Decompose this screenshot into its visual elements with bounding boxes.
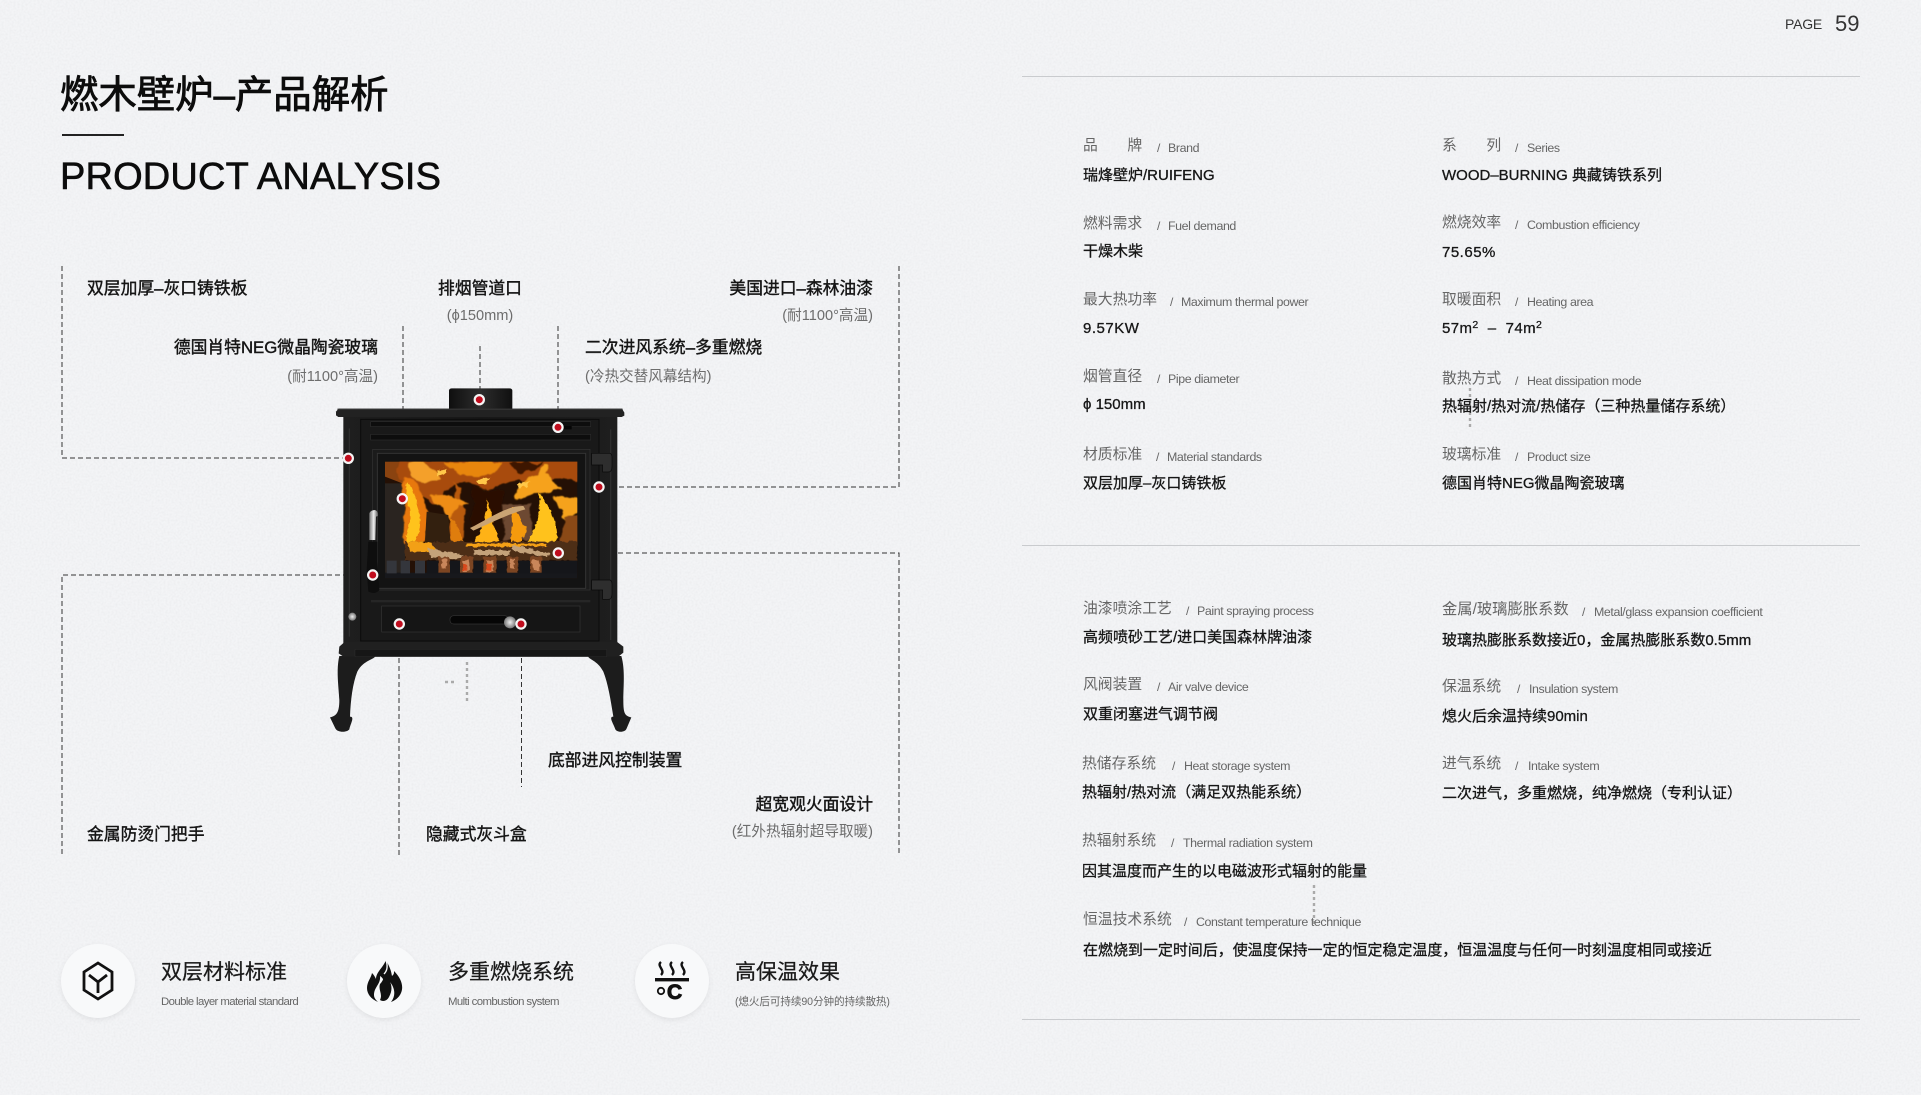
spec: glass: Product size [1527, 450, 1590, 464]
page number: PAGE [1785, 16, 1822, 32]
spec: thermal radiation: / [1171, 836, 1174, 850]
spec: glass: / [1515, 450, 1518, 464]
icon: heat and temperature [635, 944, 709, 1018]
spec: max power [1083, 291, 1308, 337]
callout: air curtain: (冷热交替风幕结构) [585, 369, 711, 385]
spec: intake: 二次进气，多重燃烧，纯净燃烧（专利认证） [1442, 785, 1742, 802]
spec: pipe diameter: / [1157, 372, 1160, 386]
spec: efficiency [1442, 214, 1640, 261]
spec: efficiency: Combustion efficiency [1527, 218, 1640, 232]
divider bottom [1022, 1019, 1860, 1020]
spec: heating area: / [1515, 295, 1518, 309]
spec: thermal radiation: 因其温度而产生的以电磁波形式辐射的能量 [1082, 863, 1367, 880]
spec: thermal radiation: Thermal radiation system [1183, 836, 1312, 850]
spec: insulation: 保温系统 [1442, 679, 1501, 695]
spec: pipe diameter [1083, 368, 1240, 413]
spec: insulation: / [1517, 682, 1520, 696]
spec: heat storage: 热辐射/热对流（满足双热能系统） [1082, 784, 1311, 801]
feature: multi combustion: 多重燃烧系统 [448, 961, 574, 984]
spec: constant temperature: 恒温技术系统 [1083, 912, 1172, 928]
spec: insulation: Insulation system [1529, 682, 1618, 696]
spec: heat dissipation: Heat dissipation mode [1527, 374, 1641, 388]
spec: thermal radiation [1082, 832, 1367, 880]
wood stove illustration [330, 388, 632, 732]
spec: max power: Maximum thermal power [1181, 295, 1308, 309]
spec: efficiency: 75.65% [1442, 244, 1496, 261]
title: 燃木壁炉–产品解析 [60, 74, 388, 117]
spec: fuel: 燃料需求 [1083, 216, 1142, 232]
spec: material: Material standards [1167, 450, 1262, 464]
callout: wide viewing window: 超宽观火面设计 [756, 795, 873, 814]
spec: expansion coefficient: 玻璃热膨胀系数接近0，金属热膨胀系数0.5mm [1442, 632, 1751, 649]
feature: double layer material [61, 944, 298, 1020]
spec: material: 材质标准 [1083, 447, 1142, 463]
spec: fuel [1083, 215, 1236, 260]
spec: intake: / [1515, 759, 1518, 773]
spec: heat storage: Heat storage system [1184, 759, 1290, 773]
icon: flame [347, 944, 421, 1018]
spec: insulation: 熄火后余温持续90min [1442, 708, 1588, 725]
spec: material: / [1156, 450, 1159, 464]
spec: pipe diameter: Pipe diameter [1168, 372, 1239, 386]
spec: paint process: Paint spraying process [1197, 604, 1314, 618]
spec: constant temperature: Constant temperature technique [1196, 915, 1361, 929]
callout: ash box: 隐藏式灰斗盒 [426, 825, 527, 844]
spec: series: WOOD–BURNING 典藏铸铁系列 [1442, 167, 1662, 184]
spec: thermal radiation: 热辐射系统 [1082, 833, 1156, 849]
callout: door handle: 金属防烫门把手 [87, 825, 204, 844]
spec: glass: 德国肖特NEG微晶陶瓷玻璃 [1442, 475, 1625, 492]
spec: series: / [1515, 141, 1518, 155]
spec: heating area: 取暖面积 [1442, 292, 1501, 308]
feature: multi combustion [347, 944, 574, 1020]
feature: multi combustion: Multi combustion system [448, 996, 559, 1008]
spec: brand: 瑞烽壁炉/RUIFENG [1083, 167, 1215, 184]
feature: double layer material: 双层材料标准 [161, 961, 287, 984]
spec: constant temperature: 在燃烧到一定时间后，使温度保持一定的恒定稳定温度，恒温温度与任何一时刻温度相同或接近 [1083, 942, 1712, 959]
callout: infrared: (红外热辐射超导取暖) [732, 824, 873, 840]
spec: brand: 品 牌 [1083, 138, 1142, 154]
spec: heat dissipation: 热辐射/热对流/热储存（三种热量储存系统） [1442, 398, 1735, 415]
spec: constant temperature: / [1184, 915, 1187, 929]
spec: glass [1442, 446, 1625, 492]
spec: air valve: / [1157, 680, 1160, 694]
spec: heat storage: / [1172, 759, 1175, 773]
spec: expansion coefficient [1442, 600, 1763, 649]
feature: double layer material: Double layer material standard [161, 996, 298, 1008]
spec: constant temperature [1083, 911, 1712, 959]
flames [385, 460, 580, 578]
spec: series [1442, 137, 1662, 184]
spec: air valve: 双重闭塞进气调节阀 [1083, 706, 1218, 723]
spec: air valve: Air valve device [1168, 680, 1248, 694]
subtitle: PRODUCT ANALYSIS [60, 156, 441, 198]
feature: heat retention: 高保温效果 [735, 961, 840, 984]
callout: paint: 美国进口–森林油漆 [729, 279, 873, 298]
callout: flue diameter: (ϕ150mm) [447, 308, 513, 324]
callout: glass: 德国肖特NEG微晶陶瓷玻璃 [174, 338, 378, 357]
spec: heat dissipation [1442, 370, 1735, 415]
callout: paint heat resistance: (耐1100°高温) [782, 308, 873, 324]
feature: heat retention: (熄火后可持续90分钟的持续散热) [735, 996, 890, 1008]
spec: pipe diameter: ϕ 150mm [1083, 396, 1146, 413]
icon: hexagon box [61, 944, 135, 1018]
spec: heating area [1442, 292, 1594, 337]
divider top [1022, 76, 1860, 77]
spec: brand: / [1157, 141, 1160, 155]
icon: heat and temperature: C [667, 981, 682, 1004]
spec: intake: Intake system [1528, 759, 1599, 773]
spec: fuel: / [1157, 219, 1160, 233]
spec: heating area: 57m2 – 74m2 [1442, 319, 1542, 337]
spec: expansion coefficient: / [1582, 605, 1585, 619]
spec: max power: 最大热功率 [1083, 292, 1157, 308]
spec: brand: Brand [1168, 141, 1199, 155]
spec: series: 系 列 [1442, 138, 1501, 154]
spec: brand [1083, 137, 1215, 184]
callout: secondary air: 二次进风系统–多重燃烧 [585, 338, 762, 357]
spec: heat storage: 热储存系统 [1082, 756, 1156, 772]
spec: max power: 9.57KW [1083, 320, 1139, 337]
spec: fuel: Fuel demand [1168, 219, 1236, 233]
callout: flue: 排烟管道口 [438, 279, 522, 298]
divider middle [1022, 545, 1860, 546]
spec: paint process: 油漆喷涂工艺 [1083, 601, 1172, 617]
spec: expansion coefficient: 金属/玻璃膨胀系数 [1442, 601, 1569, 618]
spec: paint process: / [1186, 604, 1189, 618]
red marker dots [342, 394, 605, 630]
spec: pipe diameter: 烟管直径 [1083, 369, 1142, 385]
spec: air valve: 风阀装置 [1083, 677, 1142, 693]
callout: cast iron plate: 双层加厚–灰口铸铁板 [87, 279, 247, 298]
spec: heat storage [1082, 755, 1311, 801]
door handle [369, 510, 378, 540]
spec: heat dissipation: / [1515, 374, 1518, 388]
spec: efficiency: 燃烧效率 [1442, 215, 1501, 231]
spec: material: 双层加厚–灰口铸铁板 [1083, 475, 1226, 492]
spec: intake: 进气系统 [1442, 756, 1501, 772]
spec: heating area: Heating area [1527, 295, 1593, 309]
callout: glass heat resistance: (耐1100°高温) [287, 369, 378, 385]
title underline [62, 134, 124, 136]
callout: bottom air control: 底部进风控制装置 [548, 751, 682, 770]
spec: series: Series [1527, 141, 1560, 155]
spec: max power: / [1170, 295, 1173, 309]
spec: insulation [1442, 678, 1618, 725]
page number [1785, 11, 1859, 36]
page number: 59 [1835, 11, 1859, 36]
feature: heat retention [635, 944, 890, 1020]
spec: intake [1442, 755, 1742, 802]
spec: efficiency: / [1515, 218, 1518, 232]
spec: fuel: 干燥木柴 [1083, 243, 1143, 260]
spec: air valve [1083, 676, 1248, 723]
spec: glass: 玻璃标准 [1442, 447, 1501, 463]
spec: paint process [1083, 600, 1314, 646]
spec: expansion coefficient: Metal/glass expansion coefficient [1594, 605, 1762, 619]
spec: heat dissipation: 散热方式 [1442, 371, 1501, 387]
spec: material [1083, 446, 1262, 492]
spec: paint process: 高频喷砂工艺/进口美国森林牌油漆 [1083, 629, 1312, 646]
